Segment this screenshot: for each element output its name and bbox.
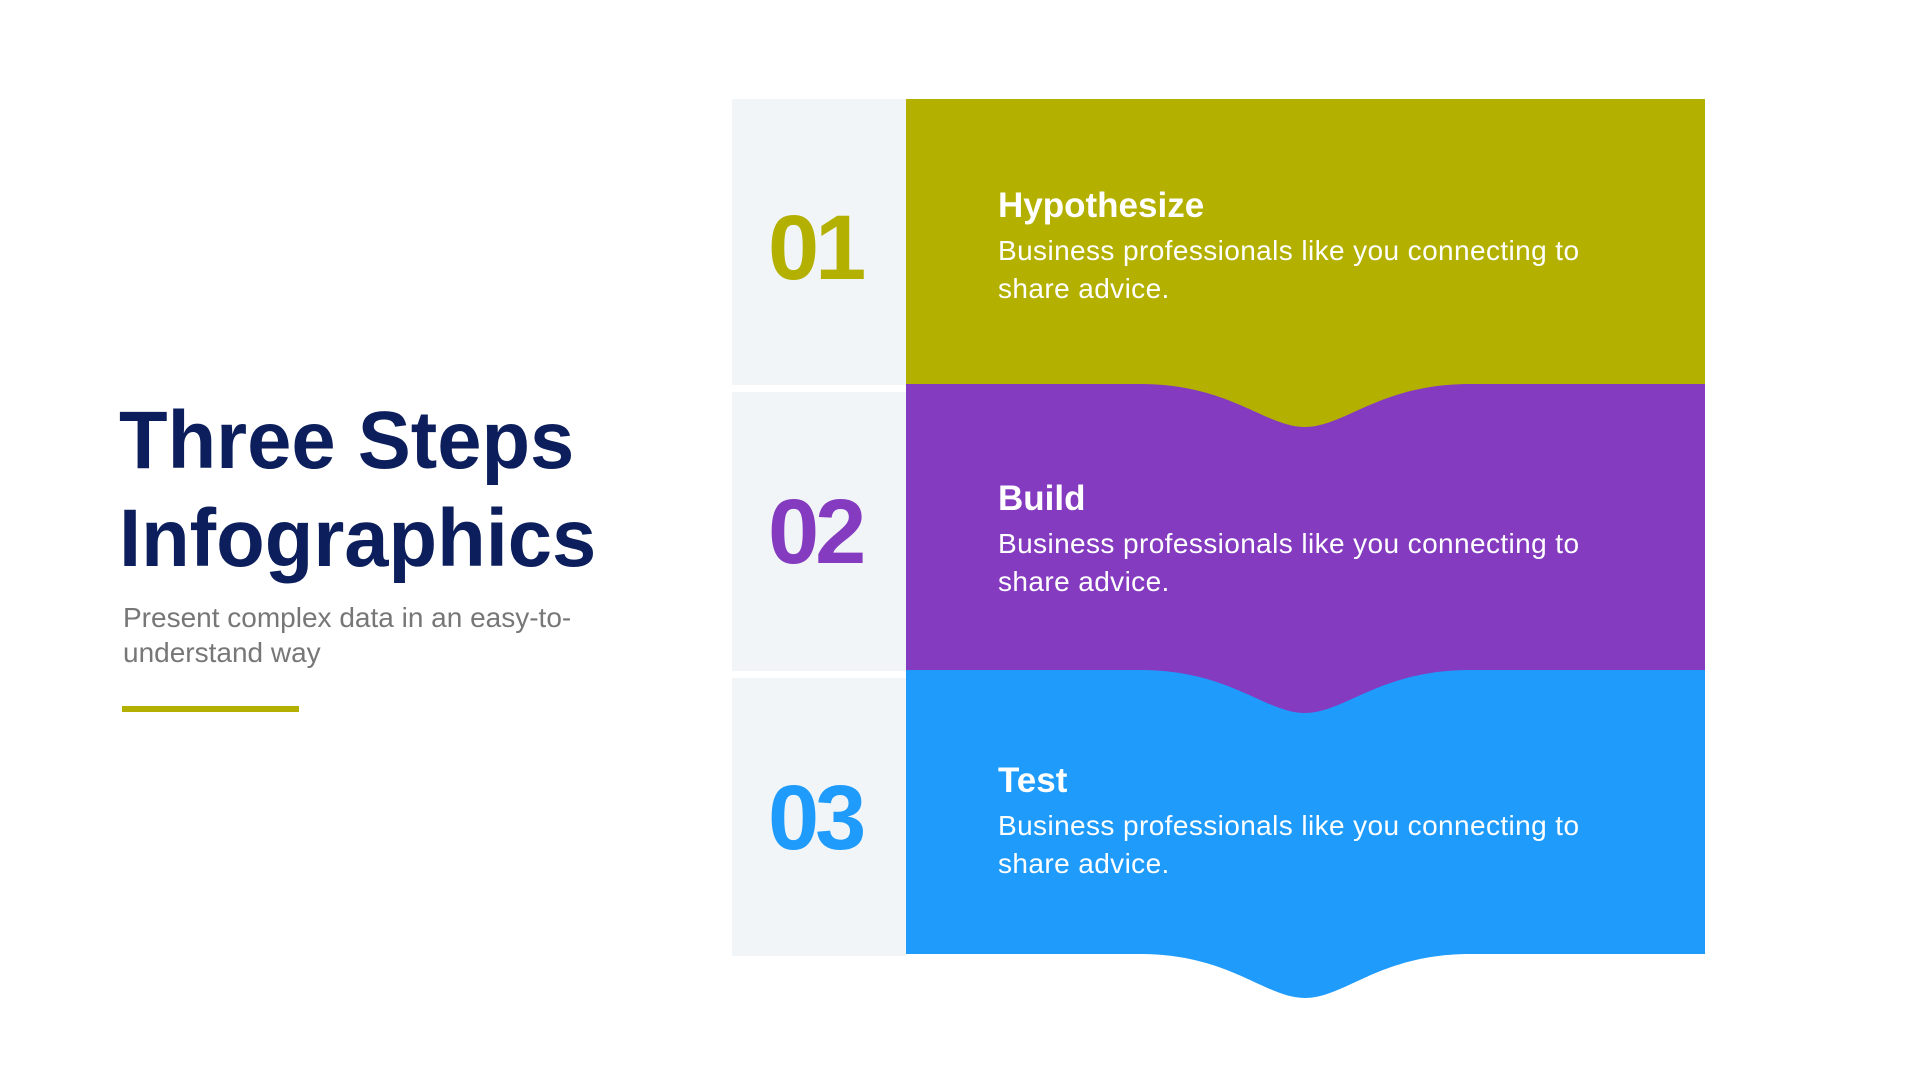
panel 3 blue: [906, 670, 1705, 998]
step 1 text: Hypothesize: [998, 186, 1204, 225]
panel 1 olive: [906, 99, 1705, 427]
step 2 text: [998, 479, 1579, 597]
number 02: 02: [768, 481, 862, 583]
gray number cells: [732, 99, 906, 956]
number 01: 01: [768, 197, 862, 299]
step 3 text: Business professionals like you connecting to share advice.: [998, 810, 1579, 879]
title: Three Steps: [119, 395, 574, 486]
subtitle: Present complex data in an easy-to-understand way: [123, 602, 571, 668]
title: [119, 395, 596, 584]
step 1 text: [998, 186, 1579, 304]
number 03: 03: [768, 767, 862, 869]
step 3 text: Test: [998, 761, 1067, 800]
panel 2 purple: [906, 384, 1705, 713]
accent underline: [122, 706, 299, 712]
title: Infographics: [119, 493, 596, 584]
step 1 text: Business professionals like you connecting to share advice.: [998, 235, 1579, 304]
step 2 text: Business professionals like you connecting to share advice.: [998, 528, 1579, 597]
step 3 text: [998, 761, 1579, 879]
step 2 text: Build: [998, 479, 1085, 518]
